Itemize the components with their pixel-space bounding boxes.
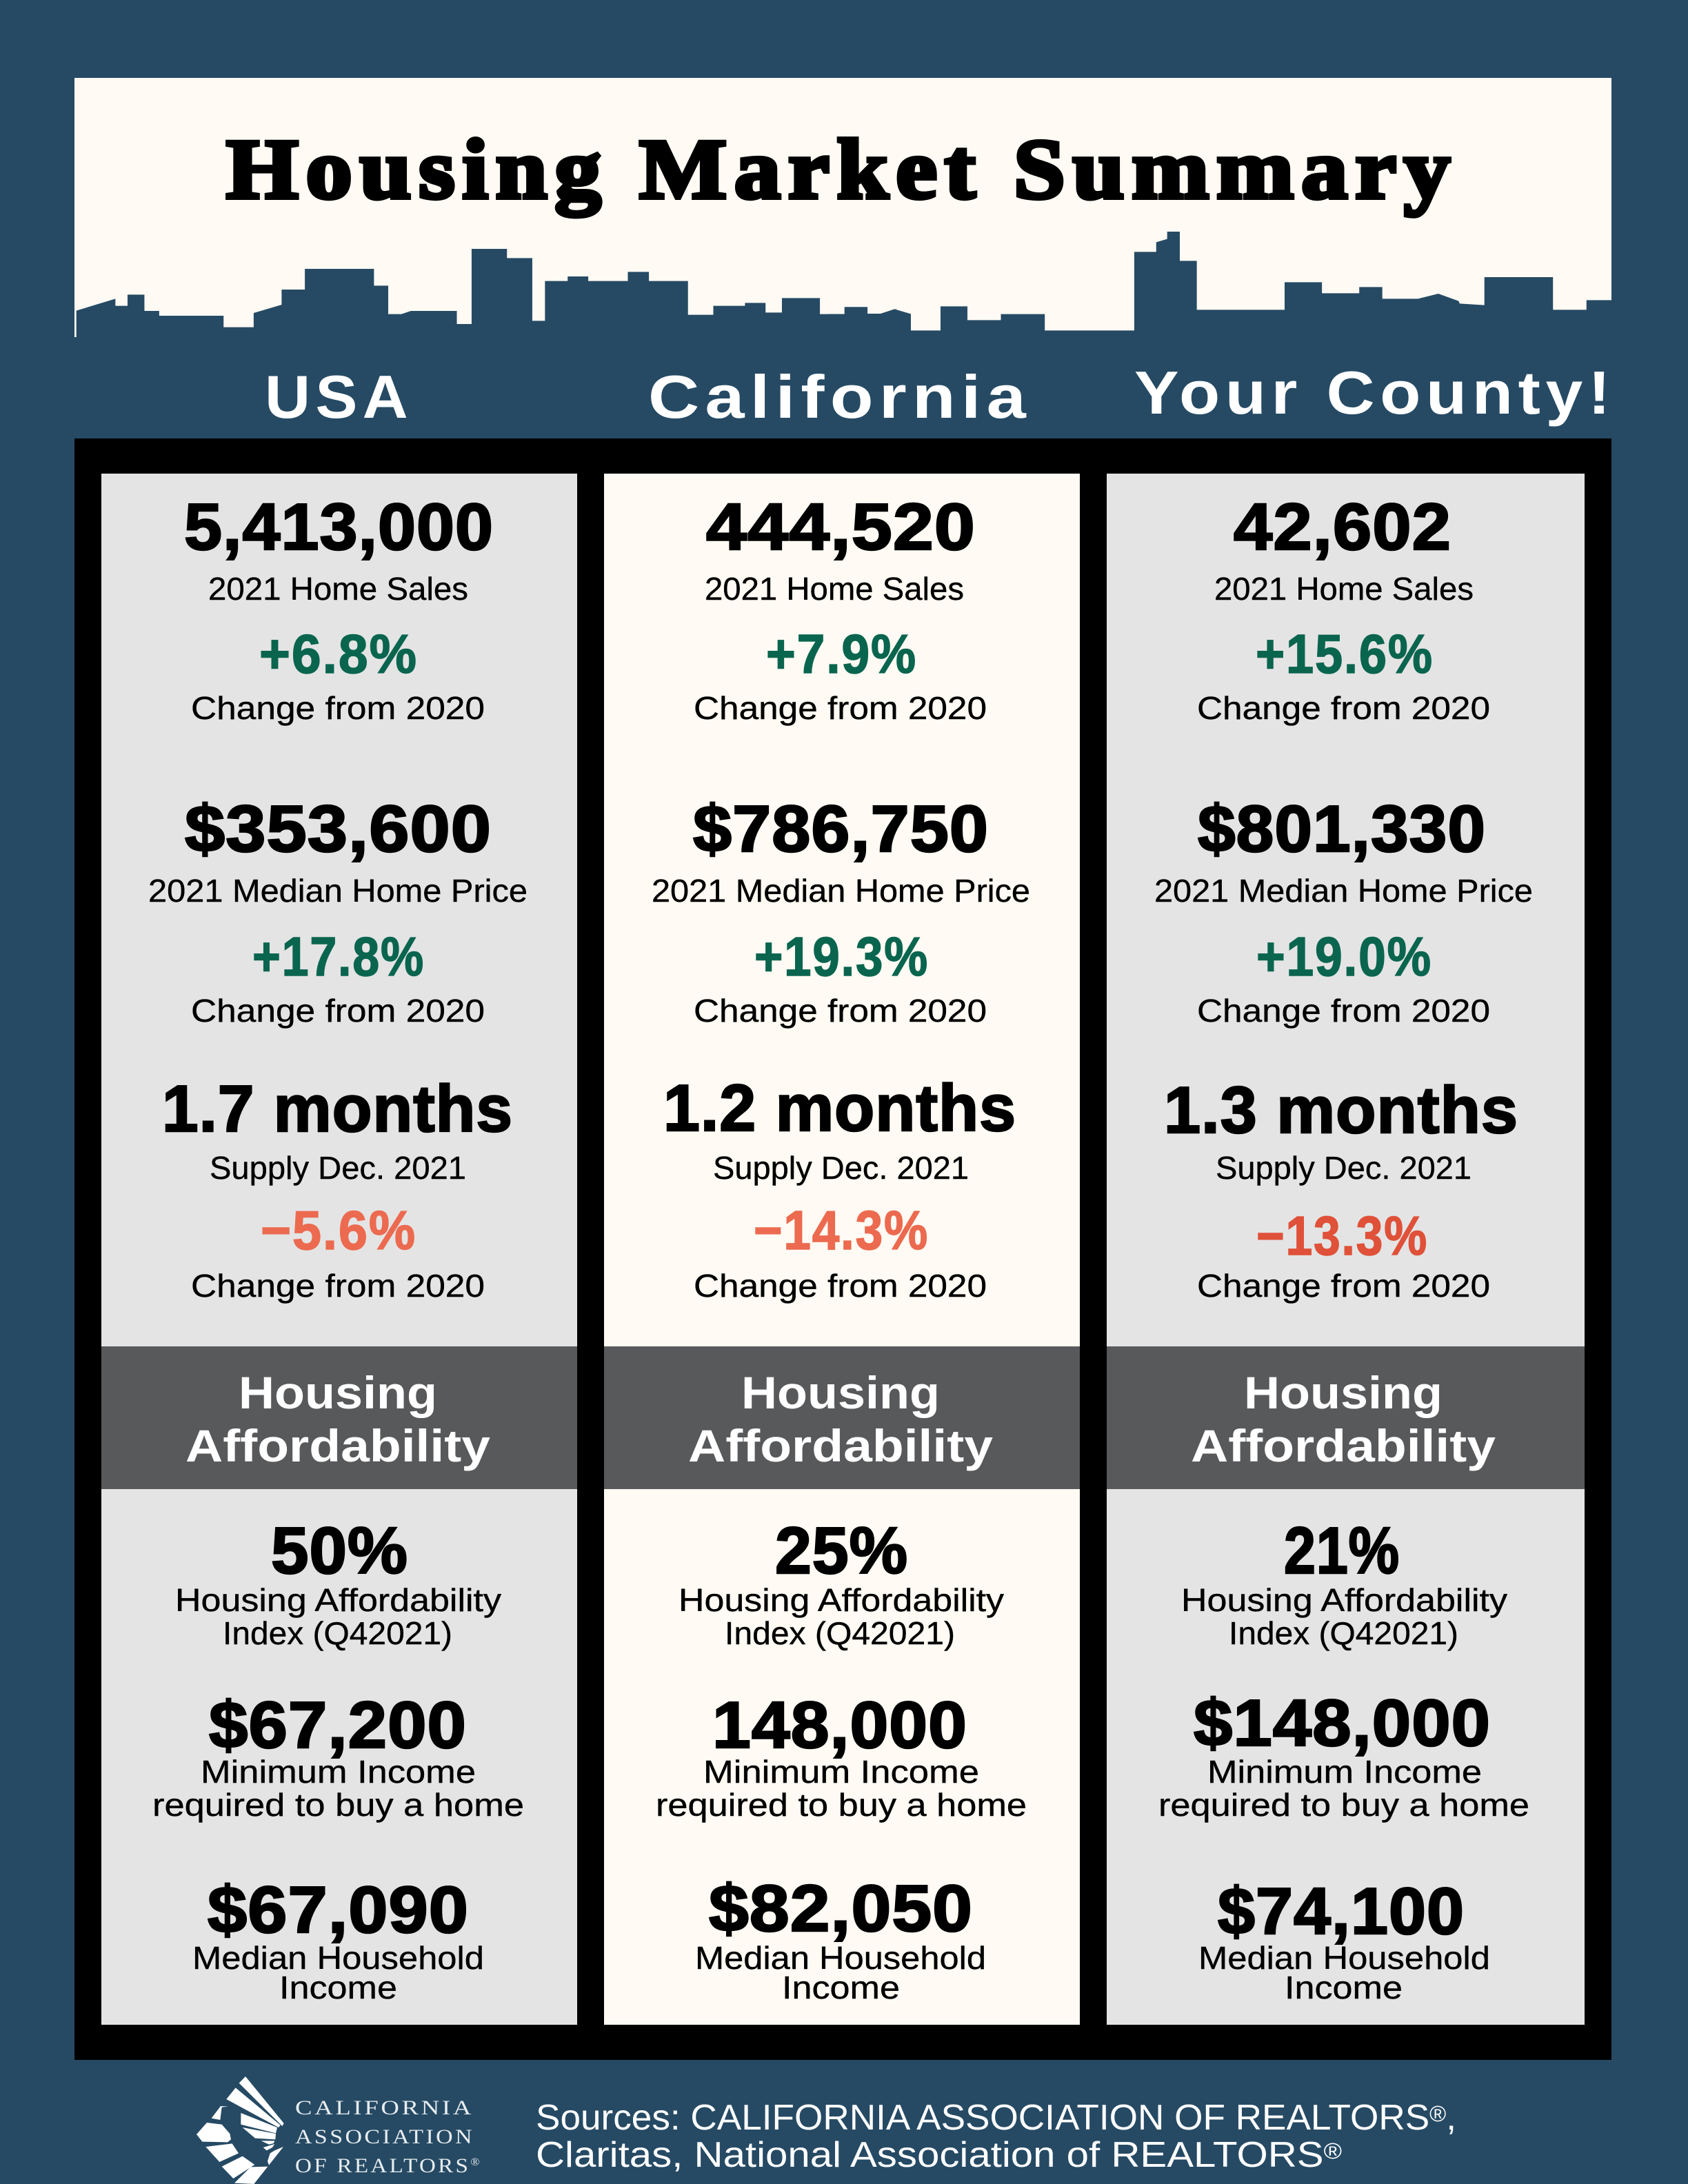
metric: supply: −13.3% (1256, 1205, 1428, 1266)
metric: minimum income: required to buy a home (1158, 1787, 1529, 1823)
metric: home sales: Change from 2020 (694, 690, 987, 726)
metric: minimum income: 148,000 (712, 1688, 967, 1762)
logo wordmark: ASSOCIATION (295, 2125, 474, 2148)
sources text (536, 2098, 1456, 2175)
metric: home sales: 2021 Home Sales (705, 571, 964, 607)
column heading: California: California (648, 363, 1032, 431)
metric: median household income (192, 1873, 484, 2005)
metric: home sales: +6.8% (259, 623, 418, 685)
metric: minimum income (1158, 1686, 1529, 1823)
metric: supply: 1.7 months (162, 1072, 513, 1146)
metric: home sales: +15.6% (1256, 623, 1434, 685)
metric: supply: −5.6% (261, 1200, 416, 1261)
metric: median household income (1198, 1874, 1490, 2005)
metric: median household income: Median Household (695, 1940, 986, 1976)
metric: home sales: Change from 2020 (191, 690, 485, 726)
icon: logo mark (197, 2076, 284, 2184)
metric: affordability index: Housing Affordability (175, 1582, 501, 1618)
title: Housing Market Summary (226, 122, 1458, 217)
metric: home sales (694, 490, 987, 726)
band heading: housing affordability: Affordability (1191, 1420, 1496, 1471)
metric: home sales: Change from 2020 (1197, 690, 1490, 726)
metric: median home price: Change from 2020 (694, 993, 987, 1029)
metric: median household income: $74,100 (1218, 1874, 1465, 1948)
metric: minimum income: Minimum Income (1207, 1754, 1482, 1790)
metric: minimum income: $148,000 (1194, 1686, 1491, 1760)
metric: home sales: 2021 Home Sales (1214, 571, 1474, 607)
metric: supply (162, 1072, 513, 1304)
metric: supply: −14.3% (754, 1200, 929, 1261)
metric: home sales: 42,602 (1234, 490, 1451, 564)
metric: home sales: 2021 Home Sales (208, 571, 468, 607)
metric: median household income: Income (1285, 1970, 1403, 2005)
metric: supply (663, 1071, 1016, 1304)
metric: minimum income: required to buy a home (656, 1787, 1027, 1823)
sources text: Sources: CALIFORNIA ASSOCIATION OF REALTORS (536, 2098, 1411, 2138)
metric: minimum income: Minimum Income (201, 1754, 476, 1790)
sources text: Claritas, National Association of REALTORS (536, 2135, 1240, 2175)
metric: minimum income (656, 1688, 1027, 1823)
column heading: USA: USA (265, 363, 413, 431)
metric: median home price: $786,750 (693, 792, 989, 866)
band heading: housing affordability (1191, 1367, 1496, 1471)
panel: USA (101, 474, 577, 2025)
metric: median household income: Median Household (1198, 1940, 1490, 1976)
metric: supply: Supply Dec. 2021 (210, 1150, 466, 1186)
metric: affordability index (1181, 1514, 1507, 1651)
metric: supply (1164, 1073, 1518, 1304)
logo wordmark: ® (470, 2156, 482, 2168)
metric: median home price (1154, 792, 1533, 1029)
logo wordmark: CALIFORNIA (295, 2096, 474, 2119)
metric: median home price: +17.8% (252, 926, 425, 987)
metric: minimum income: required to buy a home (152, 1787, 524, 1823)
metric: affordability index: Index (Q42021) (223, 1615, 452, 1651)
metric: affordability index: Housing Affordability (679, 1582, 1004, 1618)
metric: supply: Change from 2020 (191, 1268, 485, 1304)
metric: supply: 1.3 months (1164, 1073, 1518, 1147)
metric: affordability index (679, 1514, 1004, 1651)
metric: median home price (148, 792, 528, 1029)
metric: median household income: $82,050 (709, 1872, 973, 1945)
metric: median household income (695, 1872, 986, 2005)
metric: affordability index (175, 1514, 501, 1651)
metric: median home price: 2021 Median Home Price (652, 873, 1030, 909)
sources text: , (1446, 2098, 1456, 2138)
metric: median home price: $801,330 (1198, 792, 1486, 866)
metric: median household income: Income (782, 1970, 900, 2005)
panel: California (604, 474, 1080, 2025)
metric: supply: Change from 2020 (694, 1268, 987, 1304)
metric: supply: Change from 2020 (1197, 1268, 1490, 1304)
band heading: housing affordability: Affordability (688, 1420, 993, 1471)
metric: supply: 1.2 months (663, 1071, 1016, 1145)
metric: minimum income: $67,200 (209, 1688, 467, 1762)
metric: median household income: $67,090 (208, 1873, 469, 1947)
sources text: ® (1324, 2138, 1342, 2163)
metric: median home price: $353,600 (185, 792, 492, 866)
header banner with skyline (74, 78, 1611, 345)
metric: home sales: 5,413,000 (184, 490, 494, 564)
metric: median home price: Change from 2020 (1197, 993, 1490, 1029)
metric: median home price: +19.3% (754, 926, 929, 987)
metric: median household income: Income (279, 1970, 397, 2005)
metric: affordability index: 50% (271, 1514, 408, 1588)
band heading: housing affordability: Housing (1244, 1367, 1443, 1418)
metric: home sales: +7.9% (766, 623, 917, 685)
metric: affordability index: Housing Affordability (1181, 1582, 1507, 1618)
metric: median home price (652, 792, 1030, 1029)
panel: Your County (1107, 474, 1585, 2025)
metric: minimum income (152, 1688, 524, 1823)
metric: affordability index: Index (Q42021) (725, 1615, 955, 1651)
metric: affordability index: 21% (1284, 1514, 1400, 1588)
metric: supply: Supply Dec. 2021 (713, 1150, 969, 1186)
band heading: housing affordability: Housing (741, 1367, 940, 1418)
metric: supply: Supply Dec. 2021 (1216, 1150, 1471, 1186)
metric: affordability index: 25% (775, 1514, 908, 1588)
sources text: ® (1429, 2101, 1447, 2126)
column heading: Your County: Your County! (1134, 358, 1616, 427)
band heading: housing affordability: Affordability (185, 1420, 490, 1471)
metric: median household income: Median Household (192, 1940, 484, 1976)
metric: home sales (1197, 490, 1490, 726)
metric: median home price: 2021 Median Home Price (148, 873, 528, 909)
black table frame (74, 438, 1611, 2060)
band heading: housing affordability (185, 1367, 490, 1471)
metric: median home price: 2021 Median Home Price (1154, 873, 1533, 909)
band heading: housing affordability: Housing (239, 1367, 437, 1418)
metric: home sales (184, 490, 494, 726)
metric: home sales: 444,520 (706, 490, 976, 564)
logo wordmark: OF REALTORS (295, 2154, 454, 2177)
metric: median home price: +19.0% (1256, 926, 1432, 987)
logo wordmark (295, 2096, 482, 2177)
metric: median home price: Change from 2020 (191, 993, 485, 1029)
metric: affordability index: Index (Q42021) (1229, 1615, 1458, 1651)
band heading: housing affordability (688, 1367, 993, 1471)
metric: minimum income: Minimum Income (703, 1754, 979, 1790)
logo: California Association of Realtors (197, 2076, 482, 2184)
